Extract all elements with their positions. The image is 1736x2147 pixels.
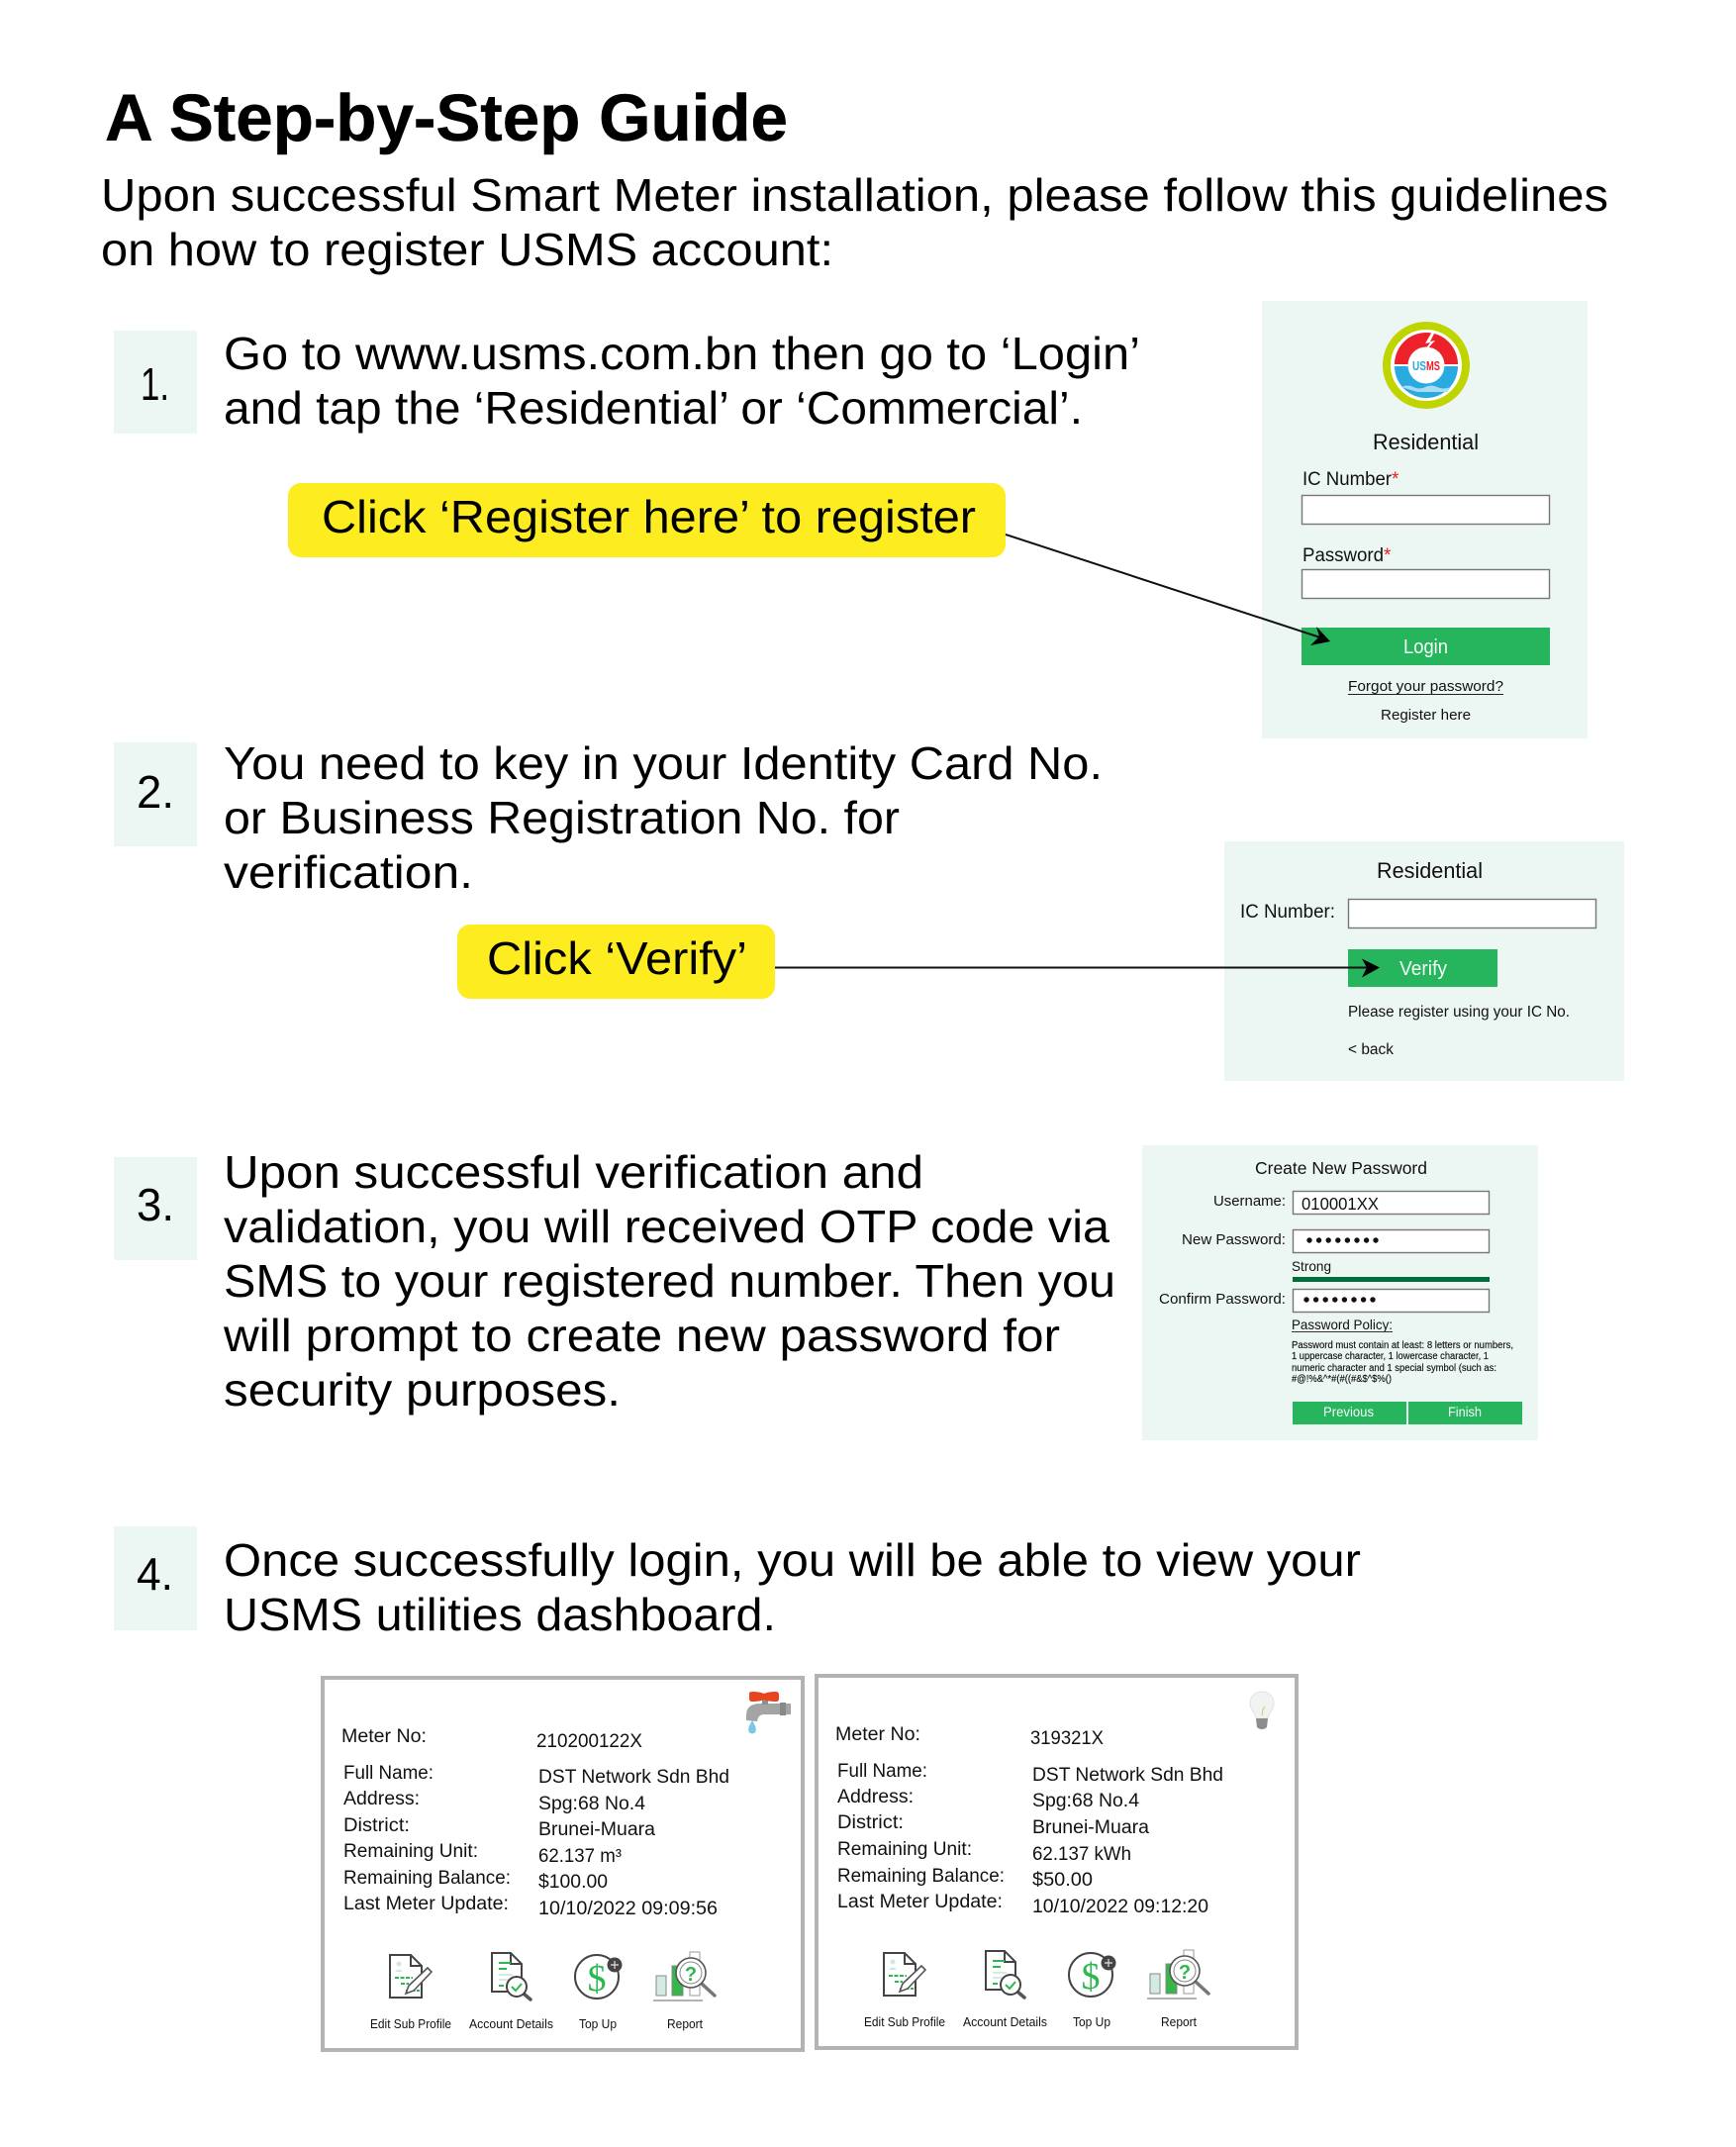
panel: create new password form: [1142, 1145, 1538, 1440]
icon: report: ?: [685, 1964, 697, 1986]
panel: water meter dashboard card: Account Details: [469, 2017, 553, 2031]
panel: create new password form: New Password:: [1182, 1231, 1286, 1248]
panel: electricity meter dashboard card: Spg:68 No.4: [1032, 1791, 1139, 1811]
panel: electricity meter dashboard card: Account Details: [963, 2015, 1047, 2029]
intro text: [101, 169, 1608, 275]
icon: account details: [986, 1951, 1024, 1998]
step 3 text: security purposes.: [224, 1364, 621, 1415]
panel: login form: Residential: [1373, 430, 1479, 454]
panel: water meter dashboard card: 210200122X: [536, 1731, 642, 1752]
step 3 text: [223, 1146, 1115, 1415]
icon: USMS logo: US: [1412, 358, 1426, 373]
step 1 number: 1.: [141, 358, 169, 410]
panel: login form: [1262, 301, 1588, 738]
icon: report: [1147, 1950, 1208, 1999]
step 1 text: [224, 328, 1140, 434]
panel: electricity meter dashboard card: 62.137 kWh: [1032, 1844, 1131, 1865]
panel: electricity meter dashboard card: [817, 1676, 1297, 2048]
panel: IC verification form: Residential: [1377, 858, 1483, 883]
panel: login form: *: [1392, 469, 1399, 490]
panel: IC verification form: IC Number:: [1240, 902, 1335, 923]
step 1 number: [114, 331, 197, 434]
step 2 text: verification.: [224, 846, 473, 898]
step 4 number: 4.: [137, 1548, 173, 1600]
panel: IC verification form: Verify: [1399, 958, 1447, 980]
panel: login form: Login: [1403, 636, 1448, 658]
icon: USMS logo: MS: [1426, 358, 1440, 373]
panel: water meter dashboard card: 62.137 m³: [538, 1846, 622, 1867]
panel: create new password form: Previous: [1323, 1404, 1374, 1419]
panel: water meter dashboard card: [323, 1678, 803, 2050]
icon: top up: [1069, 1953, 1116, 1998]
icon: top up: $: [1081, 1956, 1101, 1998]
panel: electricity meter dashboard card: 319321X: [1030, 1728, 1104, 1749]
icon: top up: [575, 1955, 622, 2000]
step 2 text: You need to key in your Identity Card No.: [224, 737, 1103, 789]
step 2 number: [114, 742, 197, 846]
panel: water meter dashboard card: Remaining Unit:: [343, 1841, 478, 1862]
panel: IC verification form: [1224, 841, 1624, 1081]
panel: water meter dashboard card: Last Meter Update:: [343, 1894, 509, 1914]
icon: edit sub profile: [884, 1953, 925, 1996]
step 4 number: [114, 1526, 197, 1630]
panel: water meter dashboard card: Remaining Balance:: [343, 1868, 511, 1889]
icon: water tap: [746, 1692, 791, 1733]
panel: electricity meter dashboard card: Remaining Unit:: [837, 1839, 972, 1860]
panel: create new password form: 1 uppercase character, 1 lowercase character, 1: [1292, 1351, 1489, 1362]
step 2 text: [224, 737, 1103, 898]
title: A Step-by-Step Guide: [105, 81, 788, 155]
step 3 text: will prompt to create new password for: [223, 1310, 1060, 1361]
icon: top up: $: [588, 1958, 606, 2000]
icon: report: ?: [1179, 1962, 1191, 1984]
panel: electricity meter dashboard card: Full Name:: [837, 1761, 927, 1782]
panel: create new password form: Create New Password: [1255, 1158, 1427, 1178]
panel: create new password form: Username:: [1213, 1193, 1286, 1210]
panel: electricity meter dashboard card: Brunei-Muara: [1032, 1817, 1149, 1838]
panel: login form: *: [1384, 545, 1392, 566]
arrow: verify callout to verify button: [775, 958, 1380, 978]
step 3 text: Upon successful verification and: [224, 1146, 923, 1198]
panel: water meter dashboard card: District:: [343, 1815, 410, 1836]
callout: register here: Click ‘Register here’ to register: [322, 491, 976, 542]
panel: create new password form: 010001XX: [1302, 1194, 1379, 1214]
panel: create new password form: Password Policy:: [1292, 1317, 1393, 1332]
panel: water meter dashboard card: $100.00: [538, 1872, 608, 1893]
panel: login form: Register here: [1381, 707, 1471, 724]
panel: water meter dashboard card: Report: [667, 2017, 703, 2031]
intro text: Upon successful Smart Meter installation, please follow this guidelines: [101, 169, 1608, 221]
step 3 number: 3.: [137, 1179, 174, 1230]
panel: water meter dashboard card: 10/10/2022 09:09:56: [538, 1899, 718, 1919]
step 2 text: or Business Registration No. for: [224, 792, 900, 843]
panel: IC verification form: Please register using your IC No.: [1348, 1004, 1570, 1021]
panel: water meter dashboard card: Top Up: [579, 2017, 617, 2031]
panel: electricity meter dashboard card: Top Up: [1073, 2015, 1110, 2029]
arrow: register callout to login form: [1006, 535, 1330, 645]
panel: water meter dashboard card: Full Name:: [343, 1763, 434, 1784]
step 3 text: validation, you will received OTP code via: [224, 1201, 1109, 1252]
panel: electricity meter dashboard card: Meter No:: [835, 1724, 920, 1745]
panel: electricity meter dashboard card: Remaining Balance:: [837, 1866, 1005, 1887]
panel: create new password form: numeric character and 1 special symbol (such as:: [1292, 1363, 1496, 1374]
step 3 number: [114, 1157, 197, 1260]
callout: register here: [288, 483, 1006, 557]
panel: electricity meter dashboard card: DST Network Sdn Bhd: [1032, 1765, 1223, 1786]
icon: light bulb: [1250, 1692, 1274, 1729]
icon: account details: [492, 1953, 530, 2000]
step 4 text: USMS utilities dashboard.: [224, 1589, 776, 1640]
panel: create new password form: Password must contain at least: 8 letters or numbers,: [1292, 1340, 1513, 1351]
panel: water meter dashboard card: Spg:68 No.4: [538, 1794, 645, 1814]
panel: login form: Password: [1302, 545, 1384, 566]
panel: electricity meter dashboard card: Report: [1161, 2015, 1197, 2029]
step 4 text: [224, 1534, 1361, 1640]
panel: electricity meter dashboard card: 10/10/2022 09:12:20: [1032, 1897, 1208, 1917]
panel: electricity meter dashboard card: District:: [837, 1812, 904, 1833]
panel: water meter dashboard card: Brunei-Muara: [538, 1819, 655, 1840]
step 1 text: and tap the ‘Residential’ or ‘Commercial’.: [224, 382, 1083, 434]
callout: verify: Click ‘Verify’: [487, 932, 747, 984]
icon: report: [653, 1952, 715, 2001]
panel: create new password form: #@!%&^*#(#((#&$^$%(): [1292, 1374, 1392, 1385]
panel: create new password form: Strong: [1292, 1258, 1331, 1274]
step 4 text: Once successfully login, you will be able to view your: [224, 1534, 1361, 1586]
panel: login form: Forgot your password?: [1348, 678, 1503, 695]
icon: USMS logo: [1387, 326, 1466, 405]
step 1 text: Go to www.usms.com.bn then go to ‘Login’: [224, 328, 1140, 379]
panel: electricity meter dashboard card: $50.00: [1032, 1870, 1093, 1891]
panel: create new password form: Finish: [1448, 1404, 1482, 1419]
panel: electricity meter dashboard card: Edit Sub Profile: [864, 2015, 945, 2029]
panel: water meter dashboard card: DST Network Sdn Bhd: [538, 1767, 729, 1788]
panel: water meter dashboard card: Address:: [343, 1789, 420, 1809]
callout: verify: [457, 925, 775, 999]
intro text: on how to register USMS account:: [101, 224, 833, 275]
step 3 text: SMS to your registered number. Then you: [224, 1255, 1115, 1307]
panel: IC verification form: < back: [1348, 1041, 1394, 1058]
panel: electricity meter dashboard card: Address:: [837, 1787, 914, 1807]
panel: login form: IC Number: [1302, 469, 1393, 490]
panel: electricity meter dashboard card: Last Meter Update:: [837, 1892, 1003, 1912]
panel: water meter dashboard card: Edit Sub Profile: [370, 2017, 451, 2031]
panel: water meter dashboard card: Meter No:: [341, 1726, 427, 1747]
icon: edit sub profile: [390, 1955, 432, 1998]
step 2 number: 2.: [137, 766, 174, 818]
panel: create new password form: Confirm Password:: [1159, 1291, 1286, 1308]
